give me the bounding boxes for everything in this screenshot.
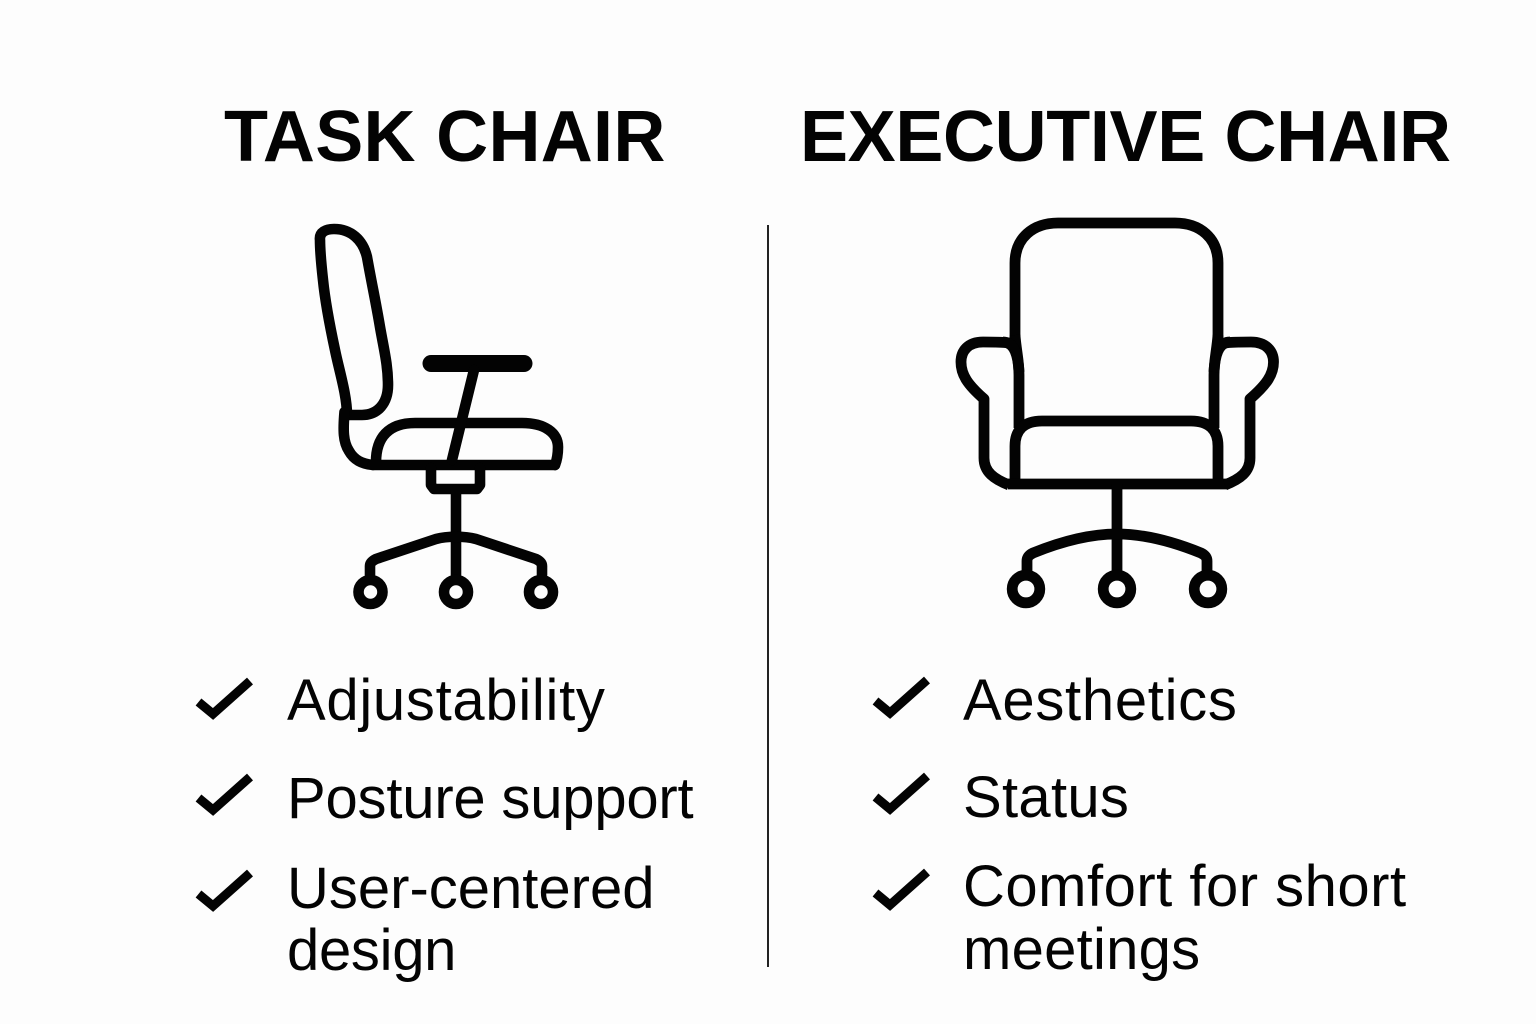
text: comfort for short meetings: meetings	[963, 917, 1200, 982]
center divider	[767, 225, 769, 967]
text: comfort for short meetings	[963, 854, 1407, 982]
text: aesthetics: Aesthetics	[963, 668, 1238, 733]
text: adjustability: Adjustability	[287, 668, 606, 733]
title: executive chair: EXECUTIVE CHAIR	[800, 97, 1451, 177]
text: user-centered design: design	[287, 918, 456, 983]
text: user-centered design	[287, 856, 654, 983]
text: status: Status	[963, 765, 1129, 830]
title: task chair: TASK CHAIR	[224, 97, 666, 177]
text: user-centered design: User-centered	[287, 856, 654, 921]
text: comfort for short meetings: Comfort for short	[963, 854, 1407, 919]
text: posture support: Posture support	[287, 766, 693, 831]
